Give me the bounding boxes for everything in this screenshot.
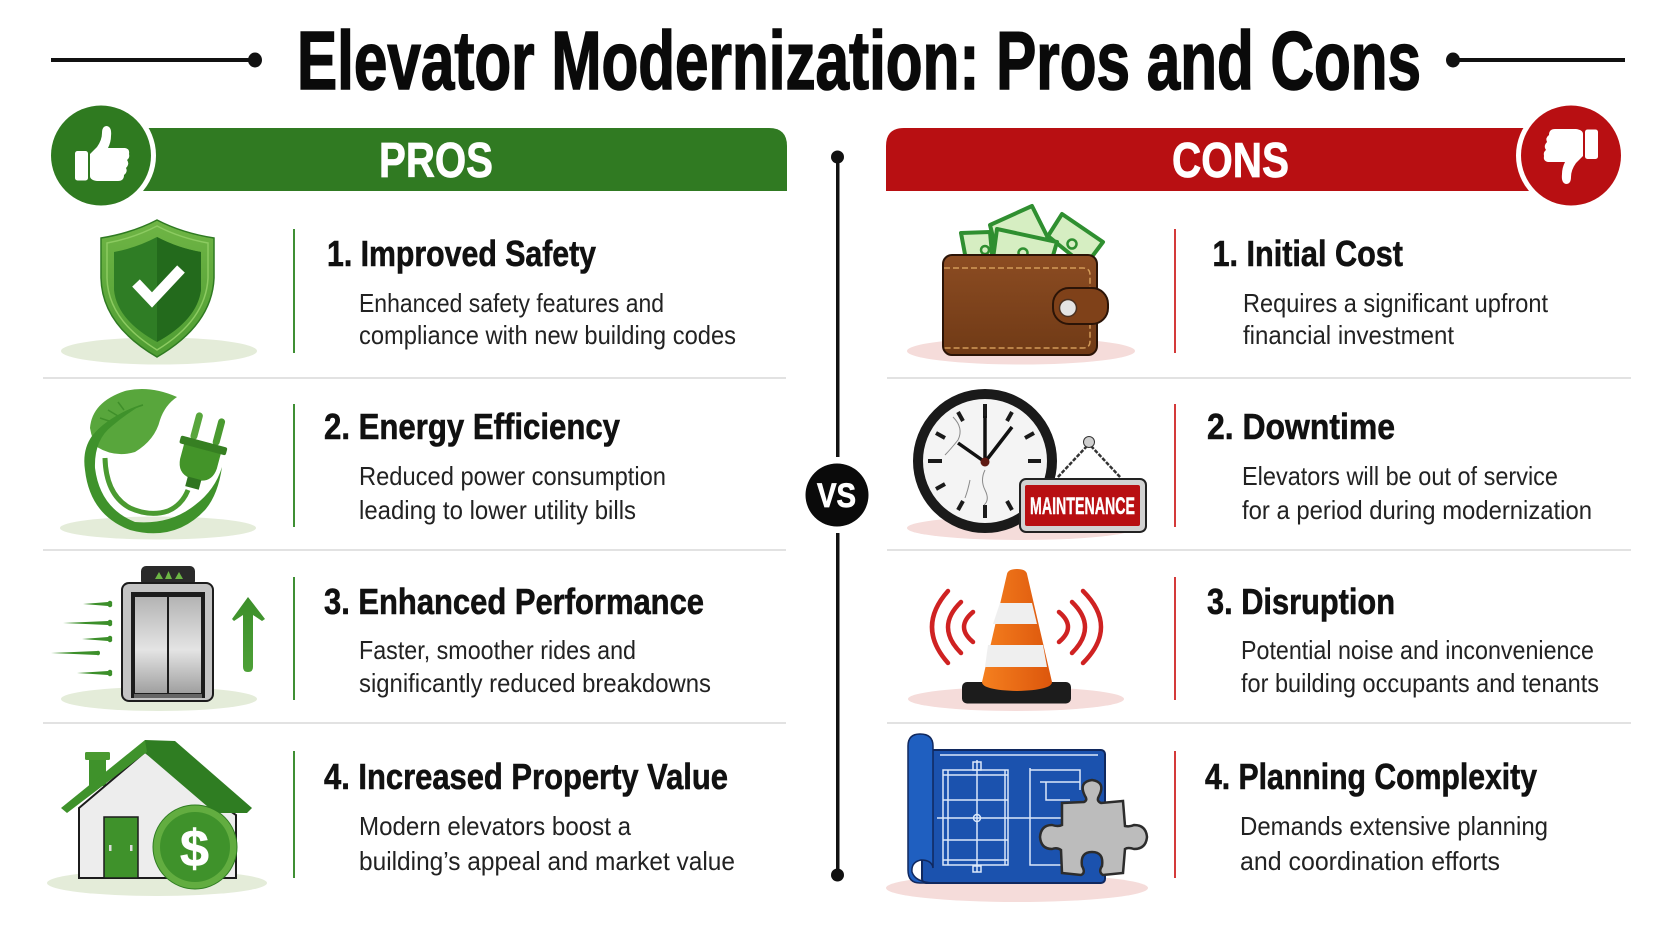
icon: house with coin — [47, 740, 267, 896]
row: increased property value — [47, 740, 735, 896]
description: building’s appeal and market value — [359, 846, 735, 876]
description: leading to lower utility bills — [359, 495, 636, 525]
row: energy efficiency — [60, 389, 666, 540]
description: for a period during modernization — [1242, 495, 1592, 525]
icon: thumbs up — [75, 126, 129, 181]
description: Enhanced safety features and — [359, 288, 664, 318]
row: disruption — [908, 569, 1599, 711]
cons header band: CONS — [1172, 134, 1289, 188]
heading: 2. Energy Efficiency — [324, 406, 620, 447]
row: enhanced performance — [51, 566, 711, 711]
row: improved safety — [61, 220, 736, 364]
row: initial cost — [907, 206, 1549, 364]
description — [1240, 811, 1548, 876]
description — [359, 461, 666, 525]
description — [1243, 288, 1549, 350]
description — [359, 635, 711, 698]
icon: thumbs down — [1544, 129, 1598, 184]
description: for building occupants and tenants — [1241, 668, 1599, 698]
VS badge: VS — [817, 477, 856, 515]
heading: 4. Planning Complexity — [1205, 756, 1537, 797]
icon: elevator — [51, 566, 265, 711]
description: significantly reduced breakdowns — [359, 668, 711, 698]
description — [359, 811, 735, 876]
description: and coordination efforts — [1240, 846, 1500, 876]
description: Elevators will be out of service — [1242, 461, 1558, 491]
description: Reduced power consumption — [359, 461, 666, 491]
row: downtime — [907, 394, 1592, 540]
description: Modern elevators boost a — [359, 811, 631, 841]
title rule left — [51, 52, 262, 68]
description — [1241, 635, 1599, 698]
icon: house with coin: $ — [180, 820, 209, 878]
heading: 1. Initial Cost — [1212, 233, 1403, 274]
icon: clock and maintenance sign — [907, 394, 1146, 540]
heading: 3. Enhanced Performance — [324, 581, 704, 622]
panel: cons — [886, 100, 1631, 902]
icon: clock and maintenance sign: MAINTENANCE — [1030, 493, 1135, 520]
center divider — [831, 150, 844, 882]
description: Potential noise and inconvenience — [1241, 635, 1594, 665]
description: Demands extensive planning — [1240, 811, 1548, 841]
heading: 4. Increased Property Value — [324, 756, 728, 797]
icon: traffic cone with sound waves — [908, 569, 1124, 711]
heading: 2. Downtime — [1207, 406, 1395, 447]
icon: wallet with cash — [907, 206, 1135, 364]
description — [359, 288, 736, 350]
title rule right — [1446, 52, 1625, 68]
icon: blueprint and puzzle piece — [886, 734, 1148, 902]
description: Faster, smoother rides and — [359, 635, 636, 665]
description: Requires a significant upfront — [1243, 288, 1549, 318]
heading: 3. Disruption — [1207, 581, 1395, 622]
icon: leaf and plug — [60, 389, 256, 540]
pros header band: PROS — [379, 134, 493, 188]
panel: pros — [43, 100, 787, 896]
VS badge — [806, 464, 868, 526]
pros header band — [46, 100, 787, 210]
description — [1242, 461, 1592, 525]
cons header band — [886, 100, 1626, 210]
description: compliance with new building codes — [359, 320, 736, 350]
row: planning complexity — [886, 734, 1548, 902]
description: financial investment — [1243, 320, 1455, 350]
heading: 1. Improved Safety — [327, 233, 596, 274]
icon: shield — [61, 220, 257, 364]
